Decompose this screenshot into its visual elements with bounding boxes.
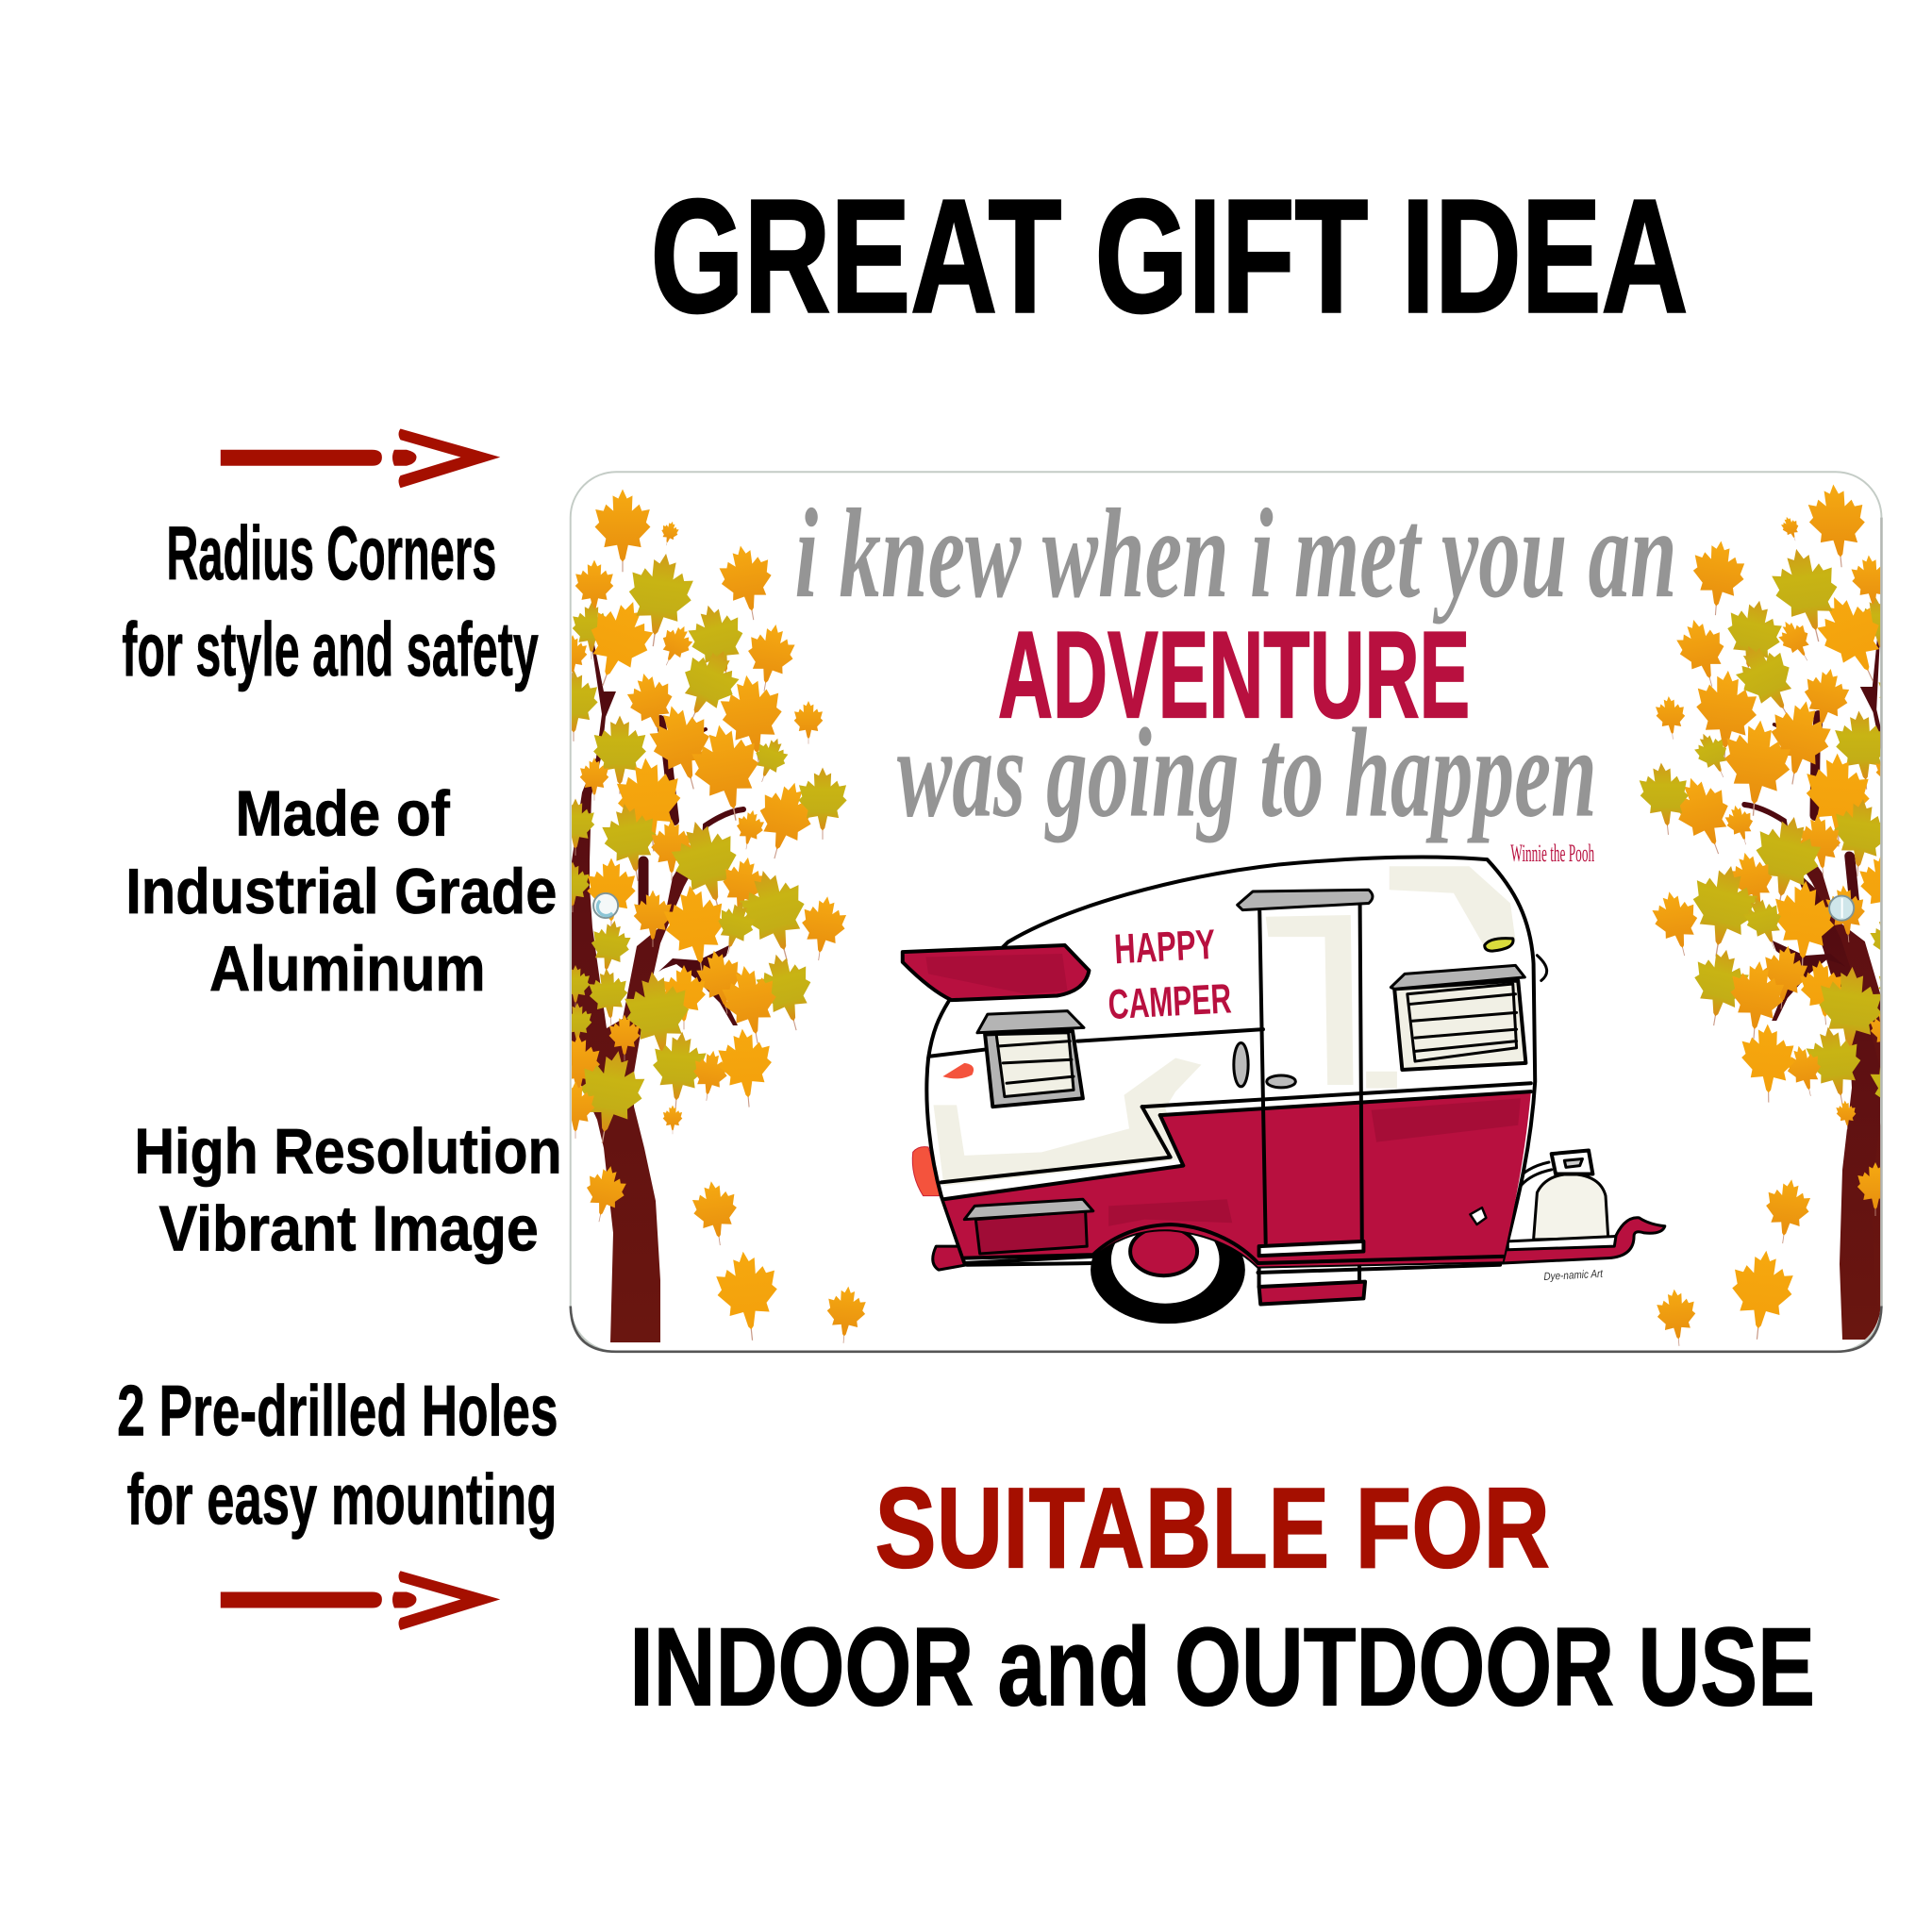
text: happy camper — [1107, 922, 1232, 1028]
camper illustration — [903, 858, 1665, 1324]
feature list — [117, 511, 562, 1541]
rear tail bumper — [933, 1246, 967, 1270]
wheel — [1091, 1216, 1245, 1324]
left tree — [549, 489, 849, 1342]
text: aluminum: Made of — [235, 779, 450, 850]
icon: right mounting hole — [1829, 896, 1854, 921]
arrow: top — [221, 429, 500, 488]
text: pre-drilled holes — [117, 1372, 558, 1541]
right tree — [1640, 485, 1881, 1340]
text: radius corners — [122, 511, 539, 692]
rear bin — [964, 1199, 1093, 1254]
details: marker lights and vent — [942, 939, 1547, 1224]
right window — [1391, 965, 1525, 1070]
cream paint patches — [934, 866, 1515, 1186]
heading: suitable for: SUITABLE FOR — [874, 1463, 1550, 1591]
text: radius corners: for style and safety — [122, 608, 539, 692]
propane tank — [1507, 1151, 1616, 1250]
text: aluminum — [125, 779, 557, 1005]
text: high resolution: Vibrant Image — [158, 1194, 539, 1265]
body — [926, 858, 1535, 1267]
front awning — [903, 945, 1089, 1000]
door — [1234, 890, 1373, 1256]
icon: left mounting hole — [593, 893, 618, 918]
arrow: bottom — [221, 1571, 500, 1630]
quote — [794, 483, 1677, 867]
text: pre-drilled holes: for easy mounting — [127, 1460, 557, 1541]
artist credit: Dye-namic Art — [1543, 1268, 1604, 1283]
text: radius corners: Radius Corners — [166, 511, 496, 596]
text: happy camper: CAMPER — [1107, 975, 1232, 1028]
belt and trim lines — [929, 1029, 1531, 1273]
panel: aluminum sign — [549, 472, 1932, 1352]
red lower body — [943, 1091, 1531, 1267]
tail light — [912, 1147, 941, 1196]
text: happy camper: HAPPY — [1113, 922, 1217, 973]
text: pre-drilled holes: 2 Pre-drilled Holes — [117, 1372, 558, 1452]
quote word: adventure: ADVENTURE — [998, 606, 1470, 743]
fallen leaves — [690, 1176, 1813, 1348]
text: aluminum: Aluminum — [209, 934, 486, 1005]
left window — [977, 1011, 1084, 1107]
step — [1259, 1263, 1365, 1304]
darker red shading — [1108, 1098, 1521, 1226]
text: high resolution — [134, 1116, 562, 1265]
text: high resolution: High Resolution — [134, 1116, 562, 1187]
attribution: Winnie the Pooh — [1510, 840, 1594, 867]
text: aluminum: Industrial Grade — [125, 857, 557, 927]
hitch tongue — [1503, 1218, 1665, 1263]
